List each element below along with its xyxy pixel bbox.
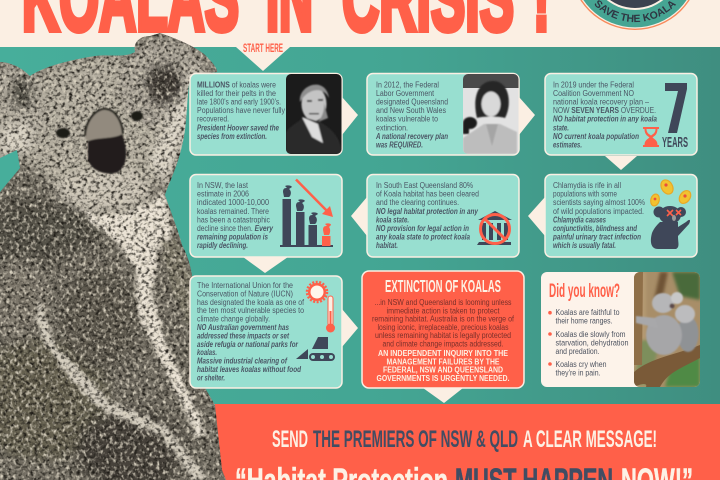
text: iucn: has designated the koala as one of (197, 298, 305, 307)
text: 2012 designation: A national recovery plan (375, 132, 448, 141)
text: iucn: The International Union for the (197, 281, 293, 290)
text: south east queensland: NO provision for legal action in (376, 224, 469, 233)
panel: chlamydia (545, 174, 697, 257)
text: iucn: or shelter. (197, 373, 225, 382)
text: chlamydia: populations with some (553, 190, 617, 199)
text: 2019 recovery plan: estimates. (553, 140, 582, 150)
text: independent inquiry: FEDERAL, NSW AND QUEENSLAND (383, 366, 503, 375)
text: nsw estimate: rapidly declining. (197, 241, 248, 250)
arrows (236, 47, 637, 403)
text: chlamydia (552, 181, 645, 250)
photo: julia gillard (463, 74, 519, 154)
number: 7 years (662, 83, 688, 151)
text: 2019 recovery plan: NOW SEVEN YEARS OVERDUE. (553, 106, 656, 115)
text: 2019 recovery plan: In 2019 under the Federal (553, 80, 634, 89)
text: iucn: koalas. (197, 348, 217, 357)
icon: thermometer (326, 296, 335, 332)
panel: extinction of koalas (362, 271, 524, 388)
number: 7 years: YEARS (662, 134, 688, 151)
text: chlamydia: scientists saying almost 100% (553, 198, 645, 207)
icon: sick koala with germs (649, 178, 693, 249)
koala face features (56, 109, 143, 174)
list: koala facts: Koalas die slowly from (556, 330, 626, 339)
text: iucn: aside refugia or national parks for (197, 340, 299, 349)
text: nsw estimate: remaining population is (197, 233, 268, 242)
text: chlamydia: Chlamydia is rife in all (553, 181, 621, 190)
icon: bulldozer (296, 337, 335, 361)
text: millions of koalas: species from extinction. (197, 132, 267, 141)
text: independent inquiry: GOVERNMENTS IS URGENTLY NEEDED. (376, 374, 510, 383)
text: iucn: addressed these impacts or set (197, 331, 289, 340)
text: independent inquiry: AN INDEPENDENT INQUIRY INTO THE (378, 349, 509, 358)
chart: declining koala numbers (280, 180, 333, 247)
text: chlamydia: Chlamydia causes (553, 215, 606, 224)
heading: extinction of koalas: EXTINCTION OF KOALAS (385, 276, 501, 296)
text: nsw estimate: In NSW, the last (197, 181, 249, 190)
icon: hourglass (643, 127, 659, 147)
heading: did you know: Did you know? (549, 281, 620, 302)
start here label: START HERE (243, 41, 283, 55)
list: koala facts: and predation. (556, 347, 600, 356)
text: millions of koalas: MILLIONS of koalas were (197, 80, 276, 89)
text: 2019 recovery plan: NO current koala population (553, 132, 639, 141)
call to action: SEND (272, 426, 308, 453)
text: independent inquiry (376, 349, 510, 383)
text: nsw estimate: estimate in 2006 (197, 190, 249, 199)
text: 2012 designation: was REQUIRED. (376, 140, 423, 150)
text: millions of koalas (197, 80, 285, 141)
text: nsw estimate: indicated 1000-10,000 (197, 198, 269, 207)
call to action: THE PREMIERS OF NSW & QLD (313, 426, 518, 453)
panel: seven years overdue (545, 74, 697, 155)
text: looming extinction: immediate action is taken to protect (386, 306, 500, 315)
icon: parliament with no symbol (477, 211, 512, 245)
text: 2019 recovery plan: national koala recovery plan – (553, 98, 649, 106)
text: nsw estimate (197, 181, 273, 250)
text: nsw estimate: koalas remained. There (197, 207, 269, 216)
text: nsw estimate: decline since then. Every (197, 224, 273, 233)
koala photo (0, 33, 226, 480)
text: 2012 designation: koalas vulnerable to (376, 115, 438, 124)
text: south east queensland: of Koala habitat has been cleared (376, 190, 479, 199)
text: iucn: habitat leaves koalas without food (197, 365, 302, 374)
panel: south east queensland (367, 174, 519, 257)
text: looming extinction (372, 298, 515, 348)
text: 2019 recovery plan: Coalition Government NO (553, 89, 634, 98)
text: south east queensland: any koala state to protect koala (376, 233, 470, 242)
text: south east queensland: In South East Queensland 80% (376, 181, 473, 190)
list: koala facts: starvation, dehydration (556, 338, 628, 348)
text: 2012 designation: In 2012, the Federal (376, 80, 439, 89)
text: south east queensland: NO legal habitat protection in any (376, 207, 478, 216)
logo: save the koala badge (580, 0, 690, 30)
text: south east queensland (376, 181, 479, 250)
text: looming extinction: ...in NSW and Queensland is looming unless (374, 298, 512, 307)
text: south east queensland: habitat. (376, 241, 398, 250)
text: iucn: climate change globally. (197, 315, 270, 324)
text: millions of koalas: late 1800's and early 1900's. (197, 98, 281, 106)
text: millions of koalas: recovered. (197, 115, 229, 124)
text: 2012 designation: designated Queensland (376, 98, 448, 106)
panel: hoover (190, 74, 342, 155)
text: independent inquiry: MANAGEMENT FAILURES BY THE (386, 357, 500, 366)
text: iucn: the ten most vulnerable species to (197, 306, 304, 315)
text: chlamydia: which is usually fatal. (553, 241, 616, 250)
panel: nsw decline (190, 174, 342, 257)
text: looming extinction: unless remaining habitat is legally protected (375, 331, 511, 340)
text: 2012 designation (375, 80, 448, 150)
text: looming extinction: losing iconic, irreplaceable, precious koalas (378, 323, 508, 332)
text: looming extinction: remaining habitat. Australia is on the verge of (372, 315, 515, 324)
text: 2019 recovery plan (553, 80, 657, 150)
text: 2019 recovery plan: state. (553, 123, 569, 132)
icon: sun (307, 282, 327, 302)
panel: labor government (367, 74, 519, 155)
text: millions of koalas: killed for their pelts in the (197, 89, 276, 98)
photo: president hoover (286, 74, 342, 154)
call to action (235, 426, 693, 480)
panel: did you know (541, 272, 700, 387)
list: koala facts: Koalas cry when (556, 360, 606, 369)
text: iucn: NO Australian government has (197, 323, 289, 332)
text: chlamydia: of wild populations impacted. (553, 207, 644, 216)
text: chlamydia: painful urinary tract infection (552, 233, 641, 242)
panel: iucn climate change (190, 276, 342, 388)
call to action band background (215, 404, 720, 480)
text: nsw estimate: has been a catastrophic (197, 215, 270, 224)
text: chlamydia: conjunctivitis, blindness and (553, 224, 638, 233)
text: south east queensland: koala state. (376, 215, 409, 224)
text: 2012 designation: Labor Government (376, 89, 435, 98)
text: iucn: Conservation of Nature (IUCN) (197, 289, 293, 298)
text: 2012 designation: extinction. (376, 123, 408, 132)
text: looming extinction: and climate change impacts addressed. (382, 340, 504, 348)
text: millions of koalas: President Hoover saved the (197, 123, 279, 132)
photo: koala and joey on branch (634, 272, 700, 387)
text: iucn (197, 281, 305, 382)
text: south east queensland: and the clearing continues. (376, 198, 459, 207)
list: koala facts (548, 308, 628, 378)
list: koala facts: they're in pain. (556, 368, 600, 378)
list: koala facts: Koalas are faithful to (556, 308, 620, 317)
text: 2012 designation: and New South Wales (376, 106, 446, 115)
text: millions of koalas: Populations have never fully (197, 106, 285, 115)
list: koala facts: their home ranges. (556, 316, 612, 326)
text: 2019 recovery plan: NO habitat protection in any koala (553, 115, 657, 124)
teal band (0, 47, 720, 404)
text: iucn: Massive industrial clearing of (197, 357, 288, 366)
